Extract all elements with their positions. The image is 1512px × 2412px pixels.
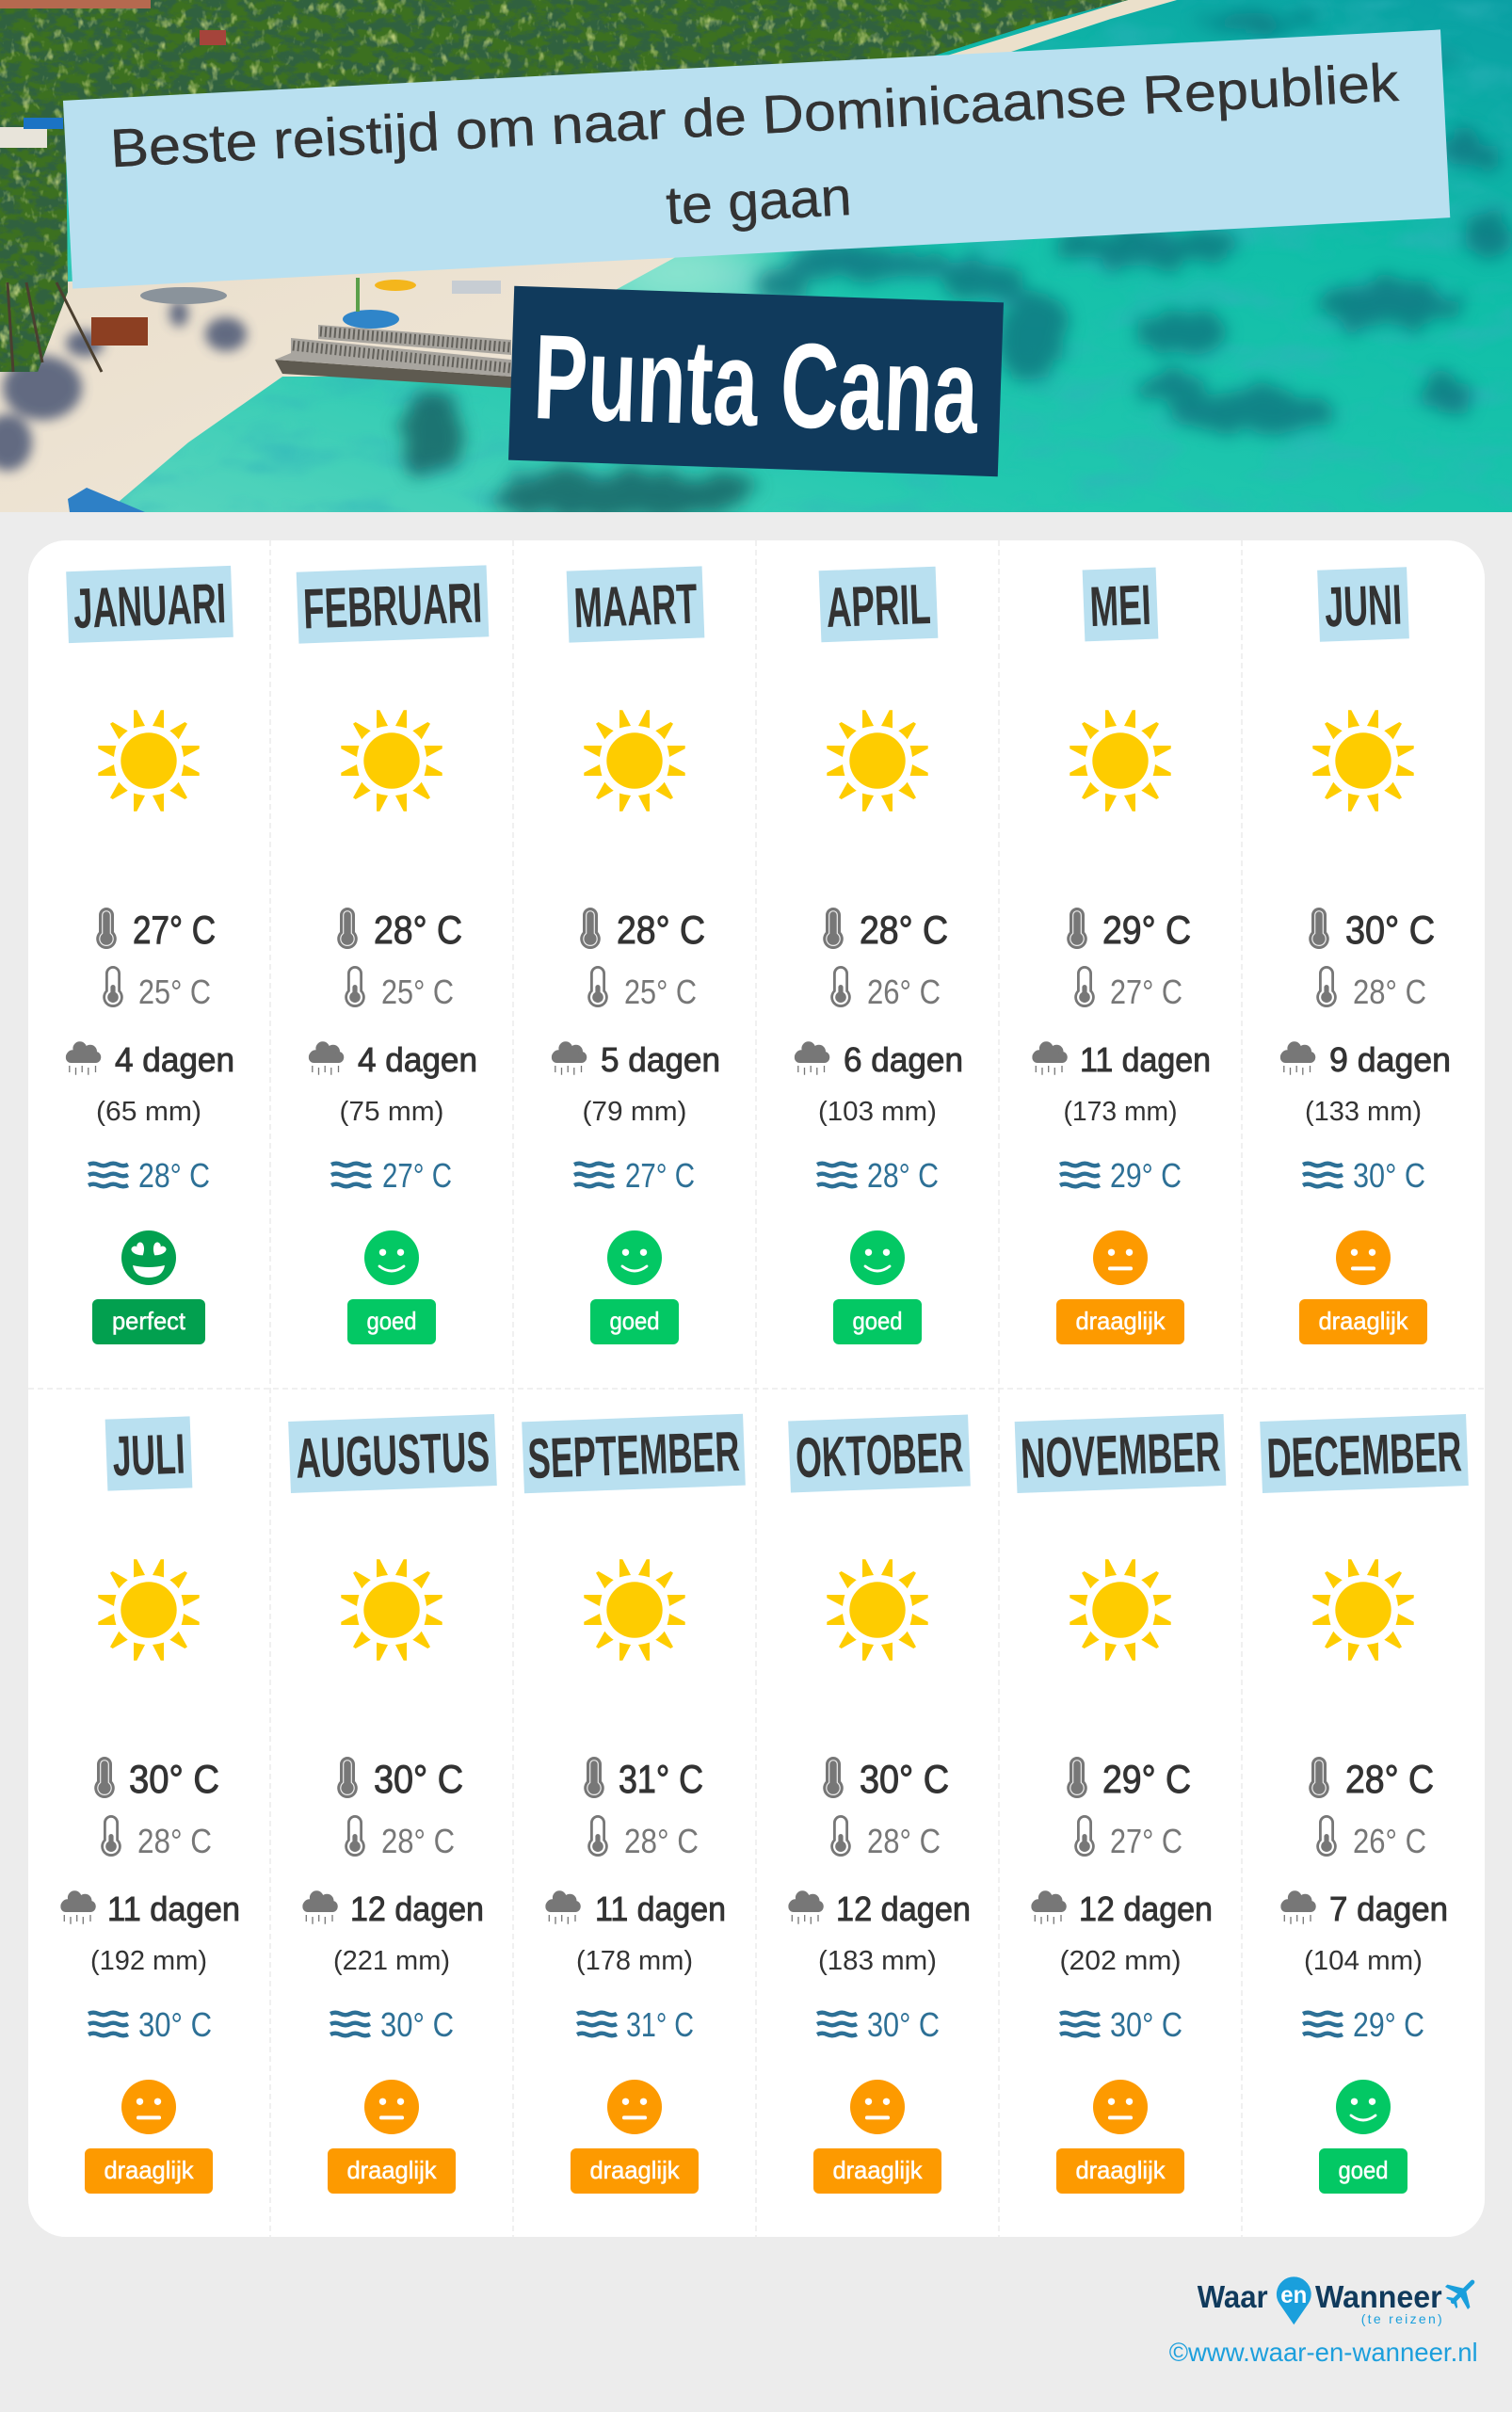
max temperature: 28° C xyxy=(860,908,948,952)
min temperature: 26° C xyxy=(867,973,941,1011)
rain days: 4 dagen xyxy=(358,1040,477,1079)
month: november xyxy=(1015,1414,1226,2194)
pier xyxy=(275,360,511,388)
icon: rating face xyxy=(850,2080,905,2134)
icon: waves xyxy=(330,2013,370,2035)
month label: MEI xyxy=(1088,573,1152,638)
icon: thermometer low xyxy=(1074,1815,1095,1857)
month label xyxy=(1317,567,1409,642)
icon: waves xyxy=(817,2013,857,2035)
max temperature: 29° C xyxy=(1102,1757,1191,1801)
rain days: 12 dagen xyxy=(1079,1889,1213,1928)
min temperature: 28° C xyxy=(1353,973,1426,1011)
min temperature: 28° C xyxy=(624,1822,699,1860)
icon: thermometer high xyxy=(580,908,601,949)
icon: rating face xyxy=(121,2080,176,2134)
icon: thermometer high xyxy=(1067,1757,1087,1798)
rain days: 6 dagen xyxy=(844,1040,963,1079)
icon: waves xyxy=(88,1164,128,1186)
icon: rating face xyxy=(364,2080,419,2134)
logo: Waar en Wanneer xyxy=(1198,2269,1486,2326)
jungle xyxy=(0,0,1128,372)
month: december xyxy=(1260,1414,1469,2194)
month: september xyxy=(522,1414,746,2194)
max temperature: 30° C xyxy=(860,1757,949,1801)
month label: MAART xyxy=(572,572,699,639)
icon: rain cloud xyxy=(1280,1041,1315,1075)
max temperature: 29° C xyxy=(1102,908,1191,952)
min temperature: 28° C xyxy=(381,1822,455,1860)
logo word: Waar: Waar xyxy=(1198,2279,1268,2314)
rating badge xyxy=(833,1299,922,1344)
icon: waves xyxy=(574,1164,614,1186)
icon: sun xyxy=(1312,710,1414,812)
icon: thermometer low xyxy=(830,966,851,1007)
rainfall: (133 mm) xyxy=(1305,1097,1422,1127)
month label xyxy=(1015,1414,1226,1493)
icon: map pin with en xyxy=(1277,2276,1311,2324)
month: april xyxy=(795,567,963,1344)
icon: rain cloud xyxy=(788,1890,824,1924)
title banner xyxy=(63,29,1450,289)
icon: rating face xyxy=(1336,2080,1391,2134)
max temperature: 28° C xyxy=(374,908,462,952)
month label: FEBRUARI xyxy=(302,571,483,640)
rating badge xyxy=(813,2148,941,2194)
water temperature: 30° C xyxy=(1353,1156,1425,1195)
max temperature: 31° C xyxy=(619,1757,703,1801)
month: januari xyxy=(66,566,234,1344)
icon: thermometer low xyxy=(1316,1815,1337,1857)
rating badge: draaglijk xyxy=(589,2156,680,2184)
rain days: 5 dagen xyxy=(601,1040,720,1079)
title text line 1: Beste reistijd om naar de Dominicaanse Republiek xyxy=(108,53,1401,179)
rainfall: (65 mm) xyxy=(96,1097,201,1127)
month label: JANUARI xyxy=(72,571,227,640)
month label: JUNI xyxy=(1324,573,1403,638)
icon: waves xyxy=(577,2013,617,2035)
icon: rating face xyxy=(364,1230,419,1285)
min temperature: 25° C xyxy=(624,973,697,1011)
icon: rating face xyxy=(607,1230,662,1285)
destination label: Punta Cana xyxy=(508,286,1004,476)
rain days: 7 dagen xyxy=(1329,1889,1448,1928)
month label: APRIL xyxy=(825,572,932,639)
icon: sun xyxy=(827,1559,928,1661)
icon: rain cloud xyxy=(545,1890,581,1924)
max temperature: 30° C xyxy=(374,1757,463,1801)
icon: rating face xyxy=(121,1230,176,1285)
month label: OKTOBER xyxy=(795,1421,964,1489)
icon: airplane xyxy=(1440,2269,1486,2315)
icon: thermometer high xyxy=(1067,908,1087,949)
min temperature: 27° C xyxy=(1110,973,1182,1011)
icon: thermometer low xyxy=(587,1815,608,1857)
icon: thermometer low xyxy=(103,966,123,1007)
icon: thermometer low xyxy=(1074,966,1095,1007)
month label: SEPTEMBER xyxy=(526,1420,741,1490)
icon: rating face xyxy=(1093,1230,1148,1285)
icon: rain cloud xyxy=(795,1041,829,1075)
min temperature: 28° C xyxy=(867,1822,941,1860)
icon: sun xyxy=(1070,710,1171,812)
rating badge: draaglijk xyxy=(832,2156,923,2184)
rain days: 11 dagen xyxy=(107,1889,240,1928)
icon: rain cloud xyxy=(1280,1890,1316,1924)
min temperature: 27° C xyxy=(1110,1822,1182,1860)
icon: waves xyxy=(1303,1164,1343,1186)
max temperature: 28° C xyxy=(617,908,705,952)
icon: sun xyxy=(98,710,200,812)
icon: thermometer low xyxy=(345,966,365,1007)
icon: sun xyxy=(1312,1559,1414,1661)
month: maart xyxy=(552,566,720,1344)
icon: rating face xyxy=(1093,2080,1148,2134)
icon: thermometer low xyxy=(1316,966,1337,1007)
month: juli xyxy=(60,1416,240,2194)
icon: rain cloud xyxy=(60,1890,96,1924)
icon: sun xyxy=(341,1559,442,1661)
month label xyxy=(522,1414,746,1493)
rain days: 4 dagen xyxy=(115,1040,234,1079)
min temperature: 28° C xyxy=(137,1822,212,1860)
icon: thermometer high xyxy=(584,1757,604,1798)
rating badge xyxy=(92,1299,205,1344)
icon: thermometer low xyxy=(101,1815,121,1857)
icon: rating face xyxy=(1336,1230,1391,1285)
icon: thermometer high xyxy=(337,1757,358,1798)
rating badge: goed xyxy=(610,1307,659,1335)
rating badge: draaglijk xyxy=(1075,2156,1166,2184)
water temperature: 28° C xyxy=(138,1156,210,1195)
icon: sun xyxy=(341,710,442,812)
rainfall: (192 mm) xyxy=(90,1946,207,1976)
panel: monthly climate calendar xyxy=(28,540,1485,2237)
icon: rating face xyxy=(607,2080,662,2134)
water temperature: 30° C xyxy=(138,2005,212,2044)
rating badge: perfect xyxy=(112,1307,186,1335)
rainfall: (202 mm) xyxy=(1060,1946,1181,1976)
min temperature: 26° C xyxy=(1353,1822,1426,1860)
max temperature: 28° C xyxy=(1345,1757,1434,1801)
month label: AUGUSTUS xyxy=(295,1420,491,1490)
rating badge: goed xyxy=(853,1307,902,1335)
rating badge: draaglijk xyxy=(1075,1307,1166,1335)
icon: thermometer high xyxy=(1309,908,1329,949)
rainfall: (75 mm) xyxy=(339,1097,444,1127)
rain days: 9 dagen xyxy=(1329,1040,1451,1079)
month label: JULI xyxy=(111,1423,186,1487)
icon: sun xyxy=(98,1559,200,1661)
icon: rain cloud xyxy=(1032,1041,1068,1075)
rating badge xyxy=(571,2148,699,2194)
rating badge: draaglijk xyxy=(104,2156,194,2184)
rating badge xyxy=(1299,1299,1427,1344)
icon: rain cloud xyxy=(1031,1890,1067,1924)
hero photo: tropical beach and turquoise sea xyxy=(0,0,1512,523)
icon: thermometer low xyxy=(587,966,608,1007)
rating badge xyxy=(328,2148,456,2194)
month: mei xyxy=(1032,568,1211,1344)
icon: thermometer low xyxy=(830,1815,851,1857)
month label xyxy=(1083,568,1158,641)
icon: thermometer high xyxy=(96,908,117,949)
icon: sun xyxy=(1070,1559,1171,1661)
icon: rating face xyxy=(850,1230,905,1285)
rain days: 11 dagen xyxy=(595,1889,726,1928)
month label xyxy=(288,1414,497,1493)
icon: thermometer high xyxy=(823,908,844,949)
rainfall: (104 mm) xyxy=(1304,1946,1423,1976)
rating badge xyxy=(1056,2148,1184,2194)
min temperature: 25° C xyxy=(138,973,211,1011)
rating badge xyxy=(347,1299,436,1344)
max temperature: 27° C xyxy=(133,908,216,952)
rating badge xyxy=(85,2148,213,2194)
rating badge: draaglijk xyxy=(1318,1307,1408,1335)
icon: sun xyxy=(584,1559,685,1661)
rain days: 12 dagen xyxy=(350,1889,484,1928)
rain days: 12 dagen xyxy=(836,1889,971,1928)
rainfall: (183 mm) xyxy=(818,1946,937,1976)
icon: thermometer high xyxy=(337,908,358,949)
icon: rain cloud xyxy=(302,1890,338,1924)
icon: rain cloud xyxy=(552,1041,587,1075)
month label xyxy=(297,565,489,644)
title text line 2: te gaan xyxy=(665,167,853,236)
max temperature: 30° C xyxy=(129,1757,219,1801)
water temperature: 27° C xyxy=(382,1156,452,1195)
icon: waves xyxy=(817,1164,857,1186)
water temperature: 29° C xyxy=(1353,2005,1424,2044)
month label xyxy=(819,567,938,642)
rainfall: (173 mm) xyxy=(1064,1097,1177,1127)
icon: thermometer high xyxy=(94,1757,115,1798)
max temperature: 30° C xyxy=(1345,908,1435,952)
icon: rain cloud xyxy=(309,1041,344,1075)
rating badge xyxy=(1056,1299,1184,1344)
water temperature: 28° C xyxy=(867,1156,939,1195)
icon: thermometer low xyxy=(345,1815,365,1857)
icon: waves xyxy=(1060,1164,1100,1186)
rating badge: goed xyxy=(1339,2156,1388,2184)
water temperature: 27° C xyxy=(625,1156,695,1195)
website credit: ©www.waar-en-wanneer.nl xyxy=(1169,2338,1478,2367)
month: augustus xyxy=(288,1414,497,2194)
rainfall: (221 mm) xyxy=(333,1946,450,1976)
icon: waves xyxy=(1303,2013,1343,2035)
icon: map pin with en: en xyxy=(1280,2282,1307,2308)
rating badge xyxy=(590,1299,679,1344)
icon: waves xyxy=(88,2013,128,2035)
logo word: Wanneer: Wanneer xyxy=(1315,2279,1442,2314)
month: juni xyxy=(1280,567,1451,1344)
month label: NOVEMBER xyxy=(1020,1420,1221,1490)
water temperature: 30° C xyxy=(380,2005,454,2044)
logo tagline: (te reizen) xyxy=(1361,2311,1442,2326)
rating badge: draaglijk xyxy=(346,2156,437,2184)
icon: sun xyxy=(584,710,685,812)
water temperature: 31° C xyxy=(626,2005,694,2044)
rain days: 11 dagen xyxy=(1080,1040,1211,1079)
rating badge: goed xyxy=(367,1307,416,1335)
rainfall: (79 mm) xyxy=(582,1097,687,1127)
min temperature: 25° C xyxy=(381,973,454,1011)
month label xyxy=(788,1415,971,1492)
month label xyxy=(105,1416,192,1491)
icon: thermometer high xyxy=(1309,1757,1329,1798)
boats xyxy=(375,280,416,291)
water temperature: 30° C xyxy=(1110,2005,1182,2044)
icon: waves xyxy=(1060,2013,1100,2035)
icon: waves xyxy=(331,1164,371,1186)
rainfall: (103 mm) xyxy=(818,1097,937,1127)
month: oktober xyxy=(788,1415,971,2194)
destination label: Punta Cana: Punta Cana xyxy=(532,310,981,459)
water temperature: 30° C xyxy=(867,2005,940,2044)
rainfall: (178 mm) xyxy=(576,1946,693,1976)
icon: sun xyxy=(827,710,928,812)
month label xyxy=(567,566,704,643)
water temperature: 29° C xyxy=(1110,1156,1182,1195)
icon: rain cloud xyxy=(66,1041,101,1075)
icon: thermometer high xyxy=(823,1757,844,1798)
month: februari xyxy=(297,565,489,1344)
month label xyxy=(66,566,233,643)
rating badge xyxy=(1319,2148,1407,2194)
